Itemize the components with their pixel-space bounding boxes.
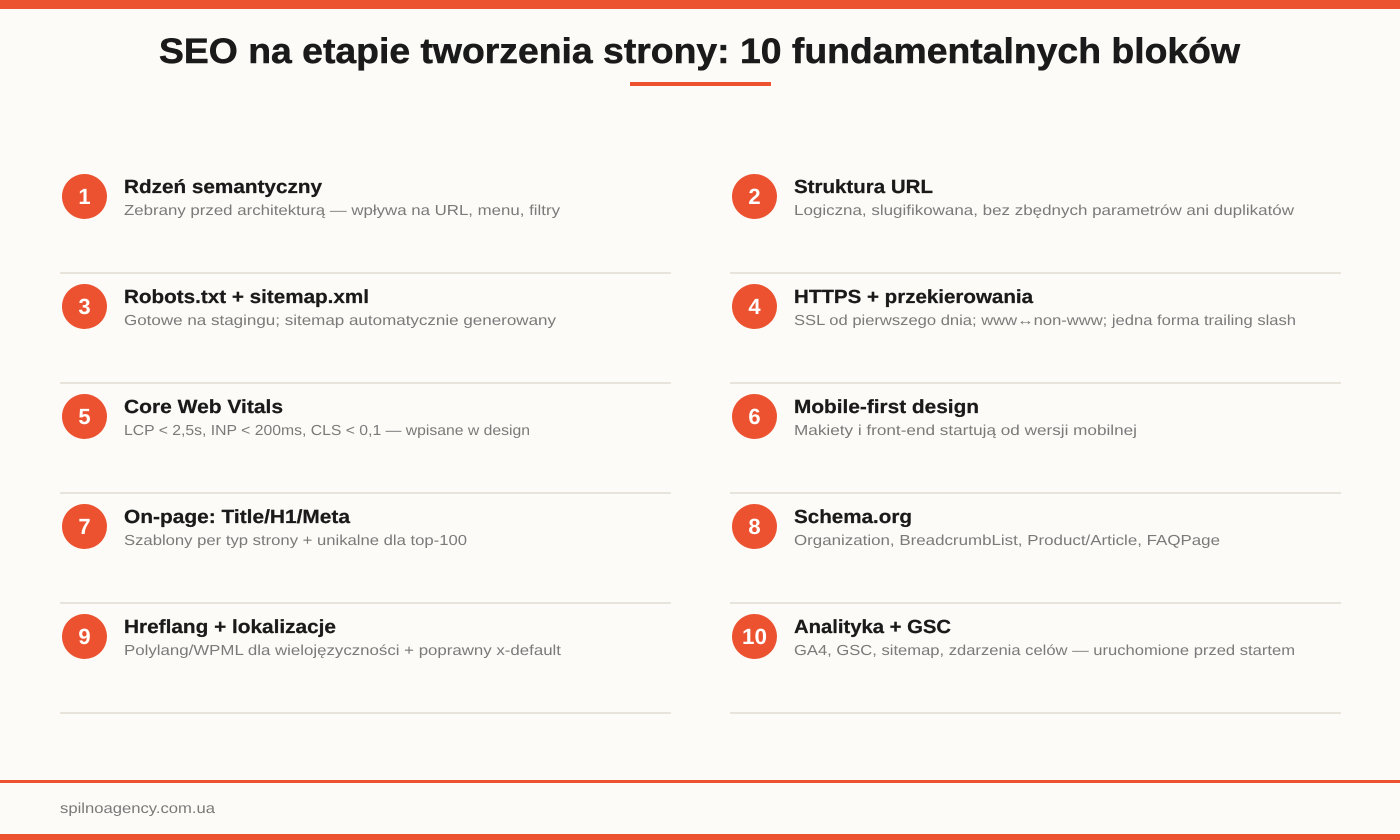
item 6 heading: Mobile-first design <box>794 397 979 418</box>
item 3 description: Gotowe na stagingu; sitemap automatycznie generowany <box>124 313 557 329</box>
number badge 9 <box>62 614 107 659</box>
number badge 3 <box>62 284 107 329</box>
item 1 <box>62 174 561 219</box>
number badge 4: 4 <box>748 294 761 319</box>
number badge 4 <box>732 284 777 329</box>
item 4 <box>732 284 1296 329</box>
item 10 heading: Analityka + GSC <box>794 617 951 638</box>
number badge 10 <box>732 614 777 659</box>
number badge 8 <box>732 504 777 549</box>
item 3 heading: Robots.txt + sitemap.xml <box>124 287 369 308</box>
number badge 3: 3 <box>78 294 91 319</box>
item 9 <box>62 614 561 659</box>
item 6 <box>732 394 1137 439</box>
item 4 heading: HTTPS + przekierowania <box>794 287 1033 308</box>
number badge 6: 6 <box>748 404 761 429</box>
title: SEO na etapie tworzenia strony: 10 fundamentalnych bloków <box>159 31 1240 71</box>
number badge 2: 2 <box>748 184 761 209</box>
number badge 1: 1 <box>78 184 91 209</box>
number badge 5: 5 <box>78 404 91 429</box>
number badge 10: 10 <box>742 624 767 649</box>
number badge 7: 7 <box>78 514 91 539</box>
item 7 heading: On-page: Title/H1/Meta <box>124 507 350 528</box>
item 8 <box>732 504 1220 549</box>
item 10 description: GA4, GSC, sitemap, zdarzenia celów — uruchomione przed startem <box>794 643 1295 659</box>
number badge 7 <box>62 504 107 549</box>
item 5 <box>62 394 530 439</box>
number badge 9: 9 <box>78 624 91 649</box>
footer source text: spilnoagency.com.ua <box>60 801 216 817</box>
item 2 heading: Struktura URL <box>794 177 933 198</box>
item 1 description: Zebrany przed architekturą — wpływa na URL, menu, filtry <box>124 203 561 219</box>
number badge 5 <box>62 394 107 439</box>
title underline <box>630 82 771 86</box>
item 1 heading: Rdzeń semantyczny <box>124 177 322 198</box>
item 5 description: LCP < 2,5s, INP < 200ms, CLS < 0,1 — wpisane w design <box>124 423 530 439</box>
number badge 8: 8 <box>748 514 761 539</box>
item 5 heading: Core Web Vitals <box>124 397 283 418</box>
item 2 <box>732 174 1295 219</box>
item 9 heading: Hreflang + lokalizacje <box>124 617 336 638</box>
bottom accent bar <box>0 834 1400 840</box>
top accent bar <box>0 0 1400 9</box>
item 3 <box>62 284 557 329</box>
footer rule <box>0 780 1400 783</box>
item 4 description: SSL od pierwszego dnia; www↔non-www; jedna forma trailing slash <box>794 313 1296 329</box>
number badge 1 <box>62 174 107 219</box>
item 8 heading: Schema.org <box>794 507 912 528</box>
item 7 <box>62 504 467 549</box>
item 6 description: Makiety i front-end startują od wersji mobilnej <box>794 423 1137 439</box>
item 9 description: Polylang/WPML dla wielojęzyczności + poprawny x-default <box>124 643 561 659</box>
number badge 6 <box>732 394 777 439</box>
item 8 description: Organization, BreadcrumbList, Product/Article, FAQPage <box>794 533 1220 549</box>
item 7 description: Szablony per typ strony + unikalne dla top-100 <box>124 533 467 549</box>
item 2 description: Logiczna, slugifikowana, bez zbędnych parametrów ani duplikatów <box>794 203 1295 219</box>
item 10 <box>732 614 1295 659</box>
number badge 2 <box>732 174 777 219</box>
